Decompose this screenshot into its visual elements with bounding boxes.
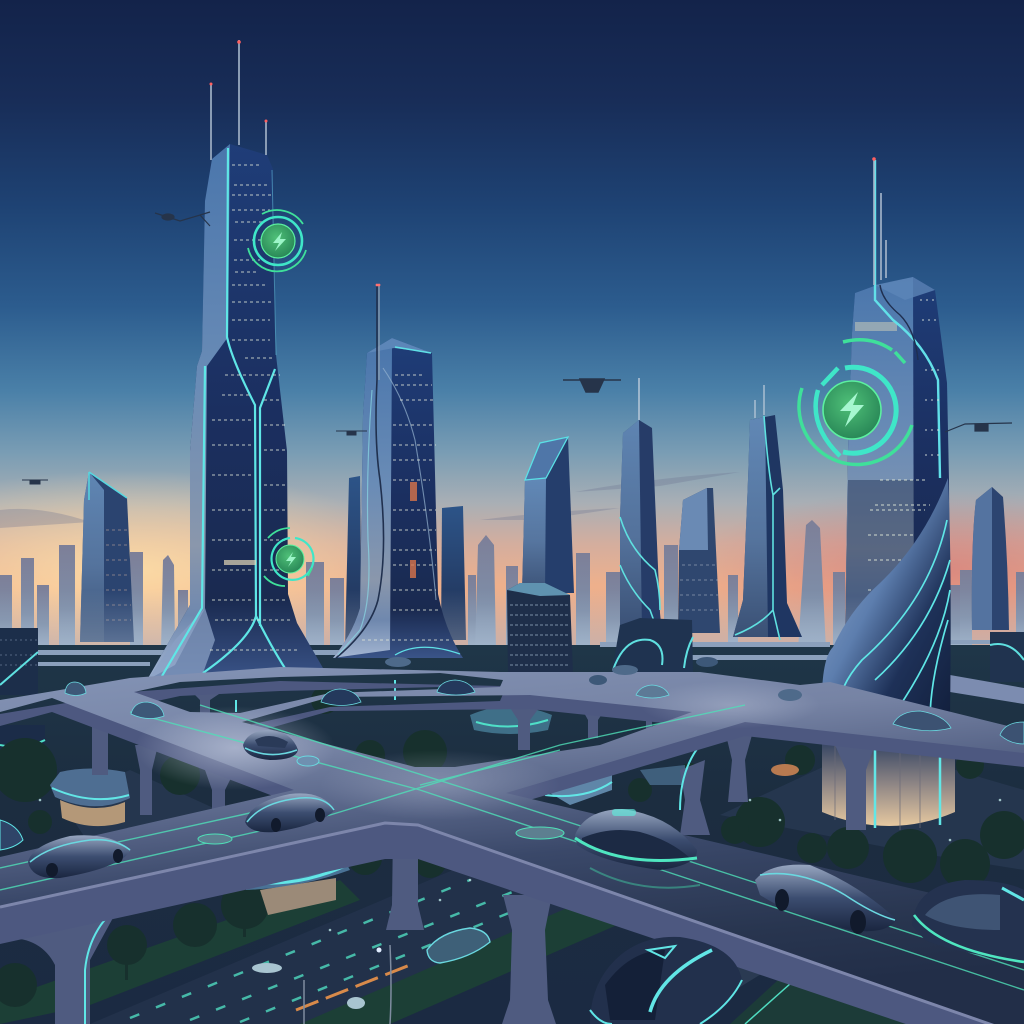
car: street lower [427, 928, 490, 963]
haze over horizon [0, 590, 1024, 650]
car: right lower road [755, 865, 897, 934]
sky background [0, 0, 1024, 680]
car: far right pod [912, 880, 1024, 962]
road lane lines [0, 705, 1024, 990]
drones [22, 212, 1012, 484]
ground roads and greenery [0, 745, 1024, 1024]
second tower [333, 284, 463, 658]
ground plane [0, 640, 1024, 1024]
car: centre-left road [245, 793, 335, 832]
pod building left [50, 768, 130, 826]
mid-background towers [0, 378, 1024, 750]
car: left lower road [28, 835, 131, 878]
energy icon: large right tower [799, 340, 912, 465]
right tower twisted base [822, 478, 951, 720]
car: large centre pod [575, 809, 700, 888]
distant skyline [0, 520, 1024, 650]
station building under road [244, 852, 350, 915]
elevated road surface [0, 667, 1024, 1024]
dome and pavilion inside road loops [470, 706, 685, 805]
background road vehicles [65, 657, 1024, 844]
right tall tower [845, 157, 950, 640]
small street cars [252, 764, 799, 1009]
far-left tower [80, 472, 134, 642]
trees [0, 686, 1024, 1007]
elevated road slab side [0, 681, 1024, 1024]
arch lights under road [85, 680, 700, 1024]
car: foreground pod under road [590, 937, 742, 1024]
mid-distance dark towers [345, 476, 466, 650]
ground lights [39, 789, 1001, 931]
glowing cylinder base of right tower [822, 740, 955, 830]
main tall tower [147, 40, 323, 680]
car: far-left clipped [0, 820, 23, 850]
energy icon: lower left tower [264, 528, 314, 586]
energy icon: upper left tower [248, 210, 306, 271]
bridge pillars [0, 690, 875, 1024]
car: mid-left pod [243, 730, 298, 760]
